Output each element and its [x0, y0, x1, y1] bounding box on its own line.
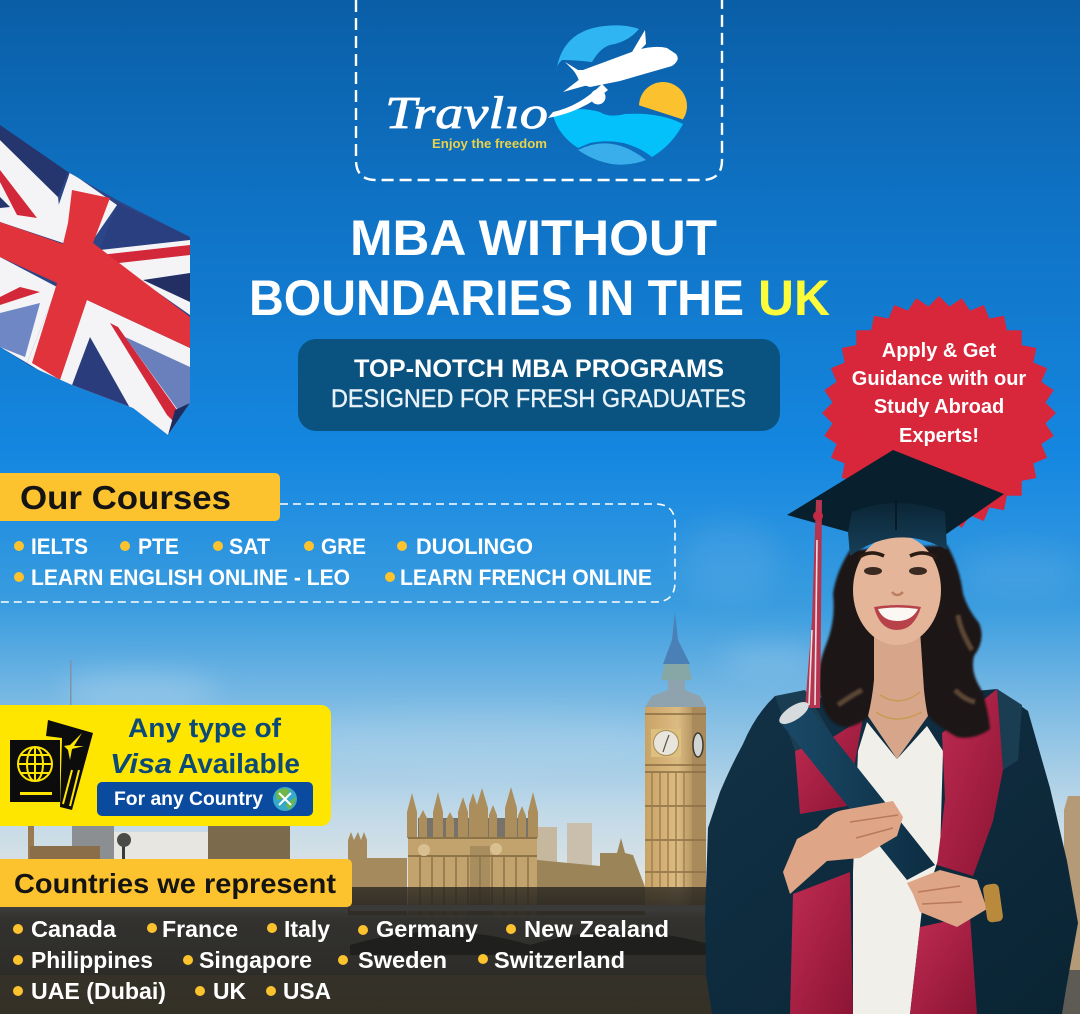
countries list — [13, 916, 669, 1004]
logo sun — [639, 82, 687, 120]
visa heading: Any type of — [128, 713, 282, 743]
title — [249, 210, 830, 326]
subtitle panel: DESIGNED FOR FRESH GRADUATES — [331, 385, 746, 413]
scroll end — [776, 698, 812, 728]
watch — [982, 883, 1004, 923]
visa pill — [97, 782, 313, 816]
roof — [418, 818, 534, 840]
right stole lower — [910, 916, 977, 1014]
clock face — [654, 730, 678, 756]
gown shoulder straps — [775, 689, 1022, 770]
badge text: Apply & Get — [882, 340, 997, 362]
logo plane — [548, 30, 678, 118]
courses list: LEARN FRENCH ONLINE — [400, 565, 652, 590]
left hand — [783, 801, 903, 894]
flag upper-left quadrant — [0, 140, 63, 243]
Big Ben clock tower — [645, 612, 706, 907]
nose — [892, 592, 903, 595]
countries list: Singapore — [199, 947, 312, 973]
countries list: Germany — [376, 916, 478, 942]
flag red cross — [0, 190, 190, 380]
logo wordmark: Travlıo — [385, 87, 548, 138]
countries list: France — [162, 916, 238, 942]
courses list: IELTS — [31, 534, 88, 559]
icon: globe with plane — [273, 787, 297, 811]
courses dashed panel — [0, 504, 675, 602]
logo tagline: Enjoy the freedom — [432, 137, 547, 151]
mouth — [874, 605, 921, 630]
courses list — [14, 534, 652, 590]
visa panel — [0, 705, 331, 826]
badge text: Study Abroad — [874, 396, 1004, 418]
face — [853, 535, 941, 645]
shirt — [853, 722, 943, 1014]
visa panel: Available — [178, 748, 300, 779]
courses list: GRE — [321, 534, 366, 559]
countries list: UAE (Dubai) — [31, 978, 166, 1004]
logo frame — [356, 0, 722, 180]
cap board — [787, 450, 1004, 535]
icon: passport and ticket — [10, 720, 93, 810]
UK flag — [0, 125, 190, 435]
visa panel: For any Country — [114, 789, 263, 810]
finger lines — [850, 815, 962, 904]
cap base — [848, 503, 947, 556]
courses list: PTE — [138, 534, 179, 559]
hair — [818, 545, 990, 738]
countries list: USA — [283, 978, 331, 1004]
tassel — [805, 500, 823, 708]
courses list: DUOLINGO — [416, 534, 533, 559]
left stole lower — [790, 872, 853, 1014]
heading: Countries we represent: Countries we represent — [14, 868, 336, 899]
countries list: Italy — [284, 916, 330, 942]
eyebrows — [858, 553, 937, 558]
flag lower-left quadrant — [0, 257, 57, 363]
countries list: Canada — [31, 916, 116, 942]
countries list: UK — [213, 978, 246, 1004]
right stole — [937, 689, 1003, 876]
graduate student — [705, 450, 1078, 1014]
courses list: SAT — [229, 534, 271, 559]
visa panel: Visa — [110, 748, 172, 779]
neck — [868, 630, 928, 759]
hair highlights — [838, 615, 975, 705]
countries list: New Zealand — [524, 916, 669, 942]
logo lower wave — [578, 143, 646, 165]
flag white vertical edges — [58, 172, 117, 243]
badge text: Guidance with our — [852, 368, 1026, 390]
title: BOUNDARIES IN THE — [249, 270, 744, 326]
right hand — [907, 870, 987, 927]
badge text: Experts! — [899, 425, 979, 447]
necklace — [876, 692, 922, 719]
left London skyline — [28, 660, 290, 862]
logo sea — [553, 109, 683, 157]
left stole upper — [795, 718, 863, 814]
countries list: Philippines — [31, 947, 153, 973]
flag lower-right quadrant — [72, 300, 190, 435]
heading: Our Courses — [0, 473, 280, 521]
subtitle panel — [298, 339, 780, 431]
river and bridge foreground — [0, 887, 720, 1014]
gown — [705, 689, 1078, 1014]
pinnacles — [407, 787, 538, 838]
countries list: Switzerland — [494, 947, 625, 973]
heading: Our Courses: Our Courses — [20, 479, 231, 516]
courses list: LEARN ENGLISH ONLINE - LEO — [31, 565, 350, 590]
red starburst badge — [822, 296, 1056, 530]
countries list: Sweden — [358, 947, 447, 973]
heading: Countries we represent — [0, 859, 352, 907]
cap crease — [895, 500, 897, 530]
right edge building — [1058, 796, 1080, 1014]
subtitle panel: TOP-NOTCH MBA PROGRAMS — [354, 355, 724, 383]
title highlight UK: UK — [758, 270, 830, 326]
clouds — [60, 520, 1080, 770]
scroll — [780, 704, 935, 880]
logo — [385, 25, 687, 165]
side clock face — [693, 733, 703, 757]
badge text — [852, 340, 1026, 447]
logo sky arc — [556, 25, 639, 72]
title: MBA WITHOUT — [350, 210, 717, 266]
eyes — [864, 567, 882, 575]
flag upper-right quadrant — [187, 236, 190, 237]
Houses of Parliament — [348, 787, 645, 915]
